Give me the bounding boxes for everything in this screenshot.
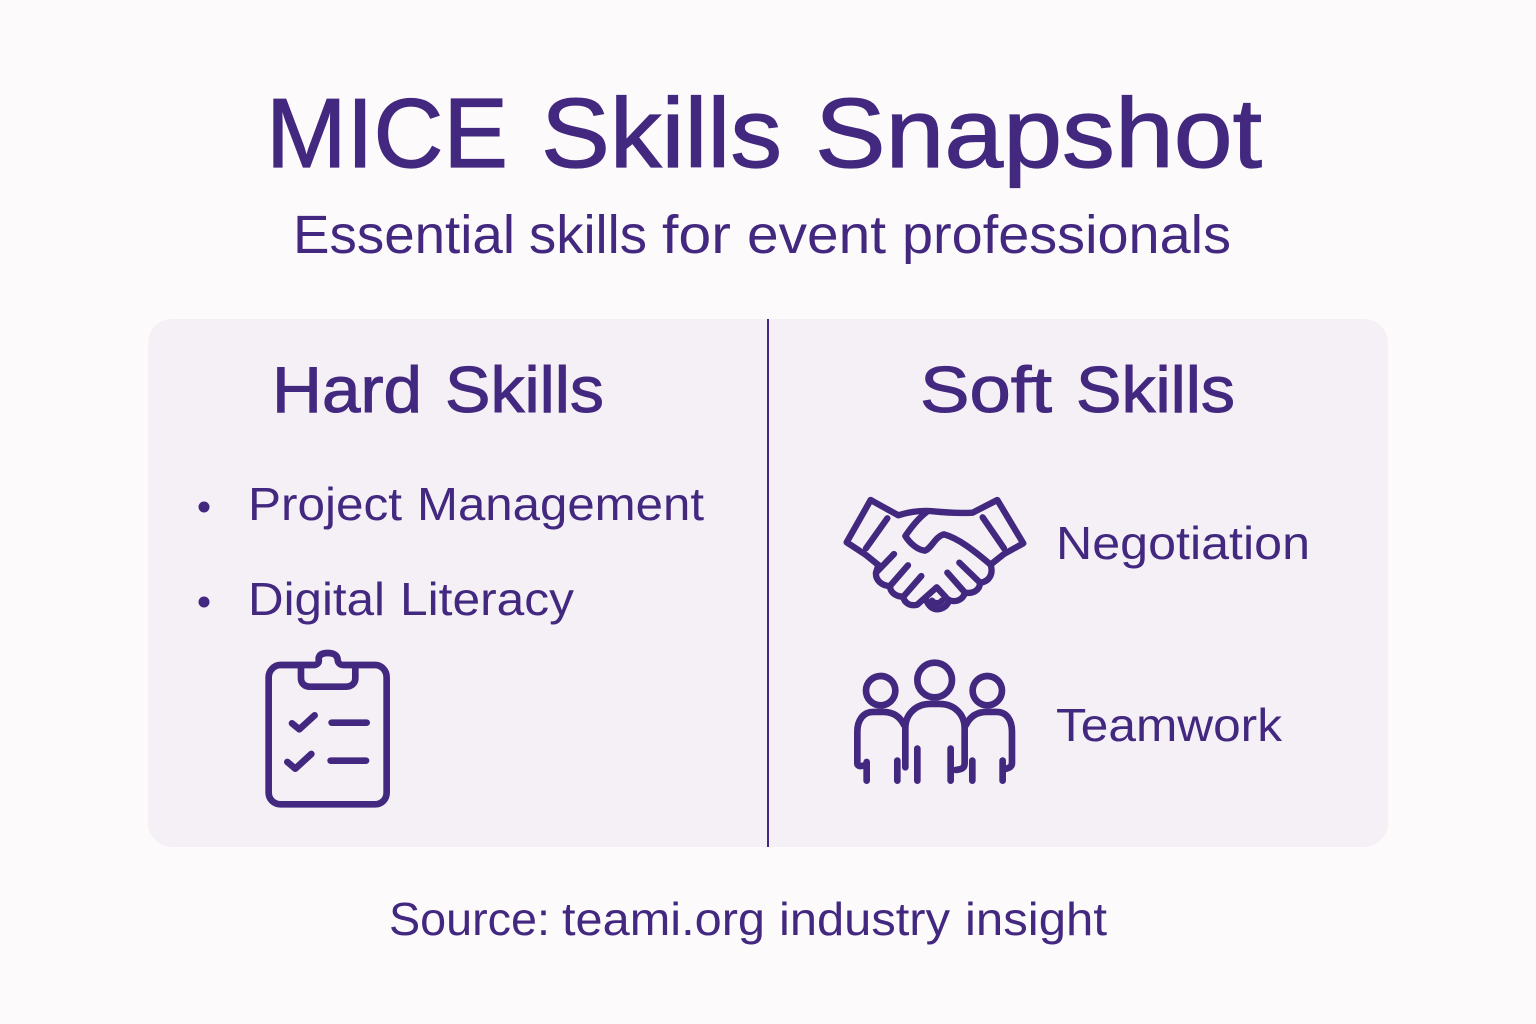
subtitle: skills: [529, 205, 647, 265]
heading: soft skills: [920, 353, 1235, 426]
source note: industry: [779, 893, 950, 945]
source note: [389, 893, 1107, 945]
title: [266, 78, 1262, 188]
bullet: digital literacy: Digital: [248, 573, 385, 625]
title: MICE: [266, 78, 508, 188]
bullet: project management: Management: [417, 478, 704, 530]
bullet: digital literacy: [198, 573, 574, 625]
title: Skills: [541, 78, 782, 188]
subtitle: for: [662, 205, 731, 265]
heading: soft skills: Skills: [1076, 353, 1235, 426]
icon: clipboard: [269, 653, 387, 804]
heading: hard skills: Skills: [445, 353, 604, 426]
subtitle: event: [747, 205, 886, 265]
panel: skills card: [148, 319, 1388, 847]
icon: handshake: [847, 500, 1023, 609]
heading: soft skills: Soft: [920, 353, 1052, 426]
bullet: digital literacy: Literacy: [400, 573, 574, 625]
label: negotiation: Negotiation: [1056, 517, 1310, 569]
title: Snapshot: [815, 78, 1262, 188]
bullet: project management: [198, 478, 704, 530]
heading: hard skills: [272, 353, 604, 426]
source note: teami.org: [562, 893, 765, 945]
label: teamwork: Teamwork: [1056, 699, 1283, 751]
subtitle: [293, 205, 1231, 265]
heading: hard skills: Hard: [272, 353, 422, 426]
subtitle: Essential: [293, 205, 515, 265]
subtitle: professionals: [902, 205, 1231, 265]
source note: Source:: [389, 893, 550, 945]
icon: team: [857, 663, 1012, 781]
source note: insight: [965, 893, 1107, 945]
bullet: project management: Project: [248, 478, 402, 530]
